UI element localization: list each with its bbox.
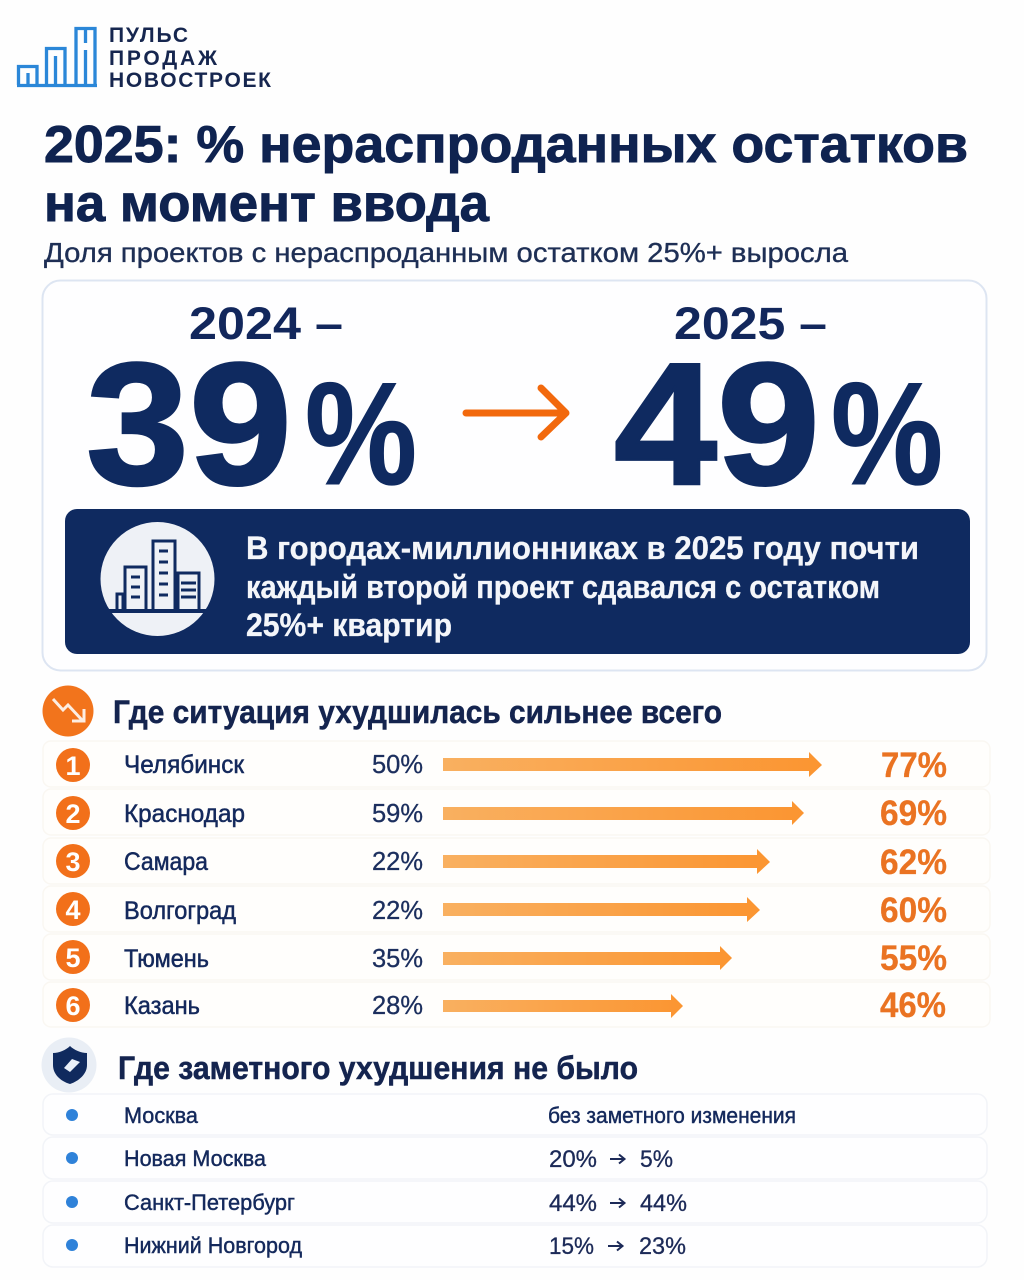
row 2: Краснодар: 69% xyxy=(880,794,947,833)
title xyxy=(44,116,968,233)
row 2: Краснодар: 59% xyxy=(372,800,423,828)
row: Нижний Новгород: Нижний Новгород xyxy=(124,1233,302,1258)
row 6: Казань: Казань xyxy=(124,992,200,1020)
row: Нижний Новгород: 15% xyxy=(549,1233,594,1260)
row: Санкт-Петербург xyxy=(43,1181,987,1223)
2025 value xyxy=(614,326,943,521)
row 6: Казань: 46% xyxy=(880,986,946,1025)
2025 value: 49 xyxy=(614,326,820,521)
row 2: Краснодар: Краснодар xyxy=(124,800,245,828)
row: Санкт-Петербург: Санкт-Петербург xyxy=(124,1190,295,1215)
icon: falling trend xyxy=(42,686,94,736)
row: Нижний Новгород: 23% xyxy=(639,1233,686,1260)
2025 label: 2025 – xyxy=(674,298,827,349)
banner text: 25%+ квартир xyxy=(246,607,452,643)
row 5: Тюмень: 35% xyxy=(372,945,423,973)
2024 value: % xyxy=(305,352,417,515)
row 4: Волгоград: 60% xyxy=(880,891,947,930)
row 2: Краснодар: 2 xyxy=(65,799,81,829)
section heading: worsened most: Где ситуация ухудшилась сильнее всего xyxy=(113,694,722,730)
row 1: Челябинск: 77% xyxy=(881,746,947,785)
row 3: Самара xyxy=(43,838,990,884)
section heading: no notable worsening xyxy=(42,1038,638,1092)
banner text xyxy=(246,530,919,643)
logo wordmark: НОВОСТРОЕК xyxy=(109,69,271,92)
logo icon: bars xyxy=(17,28,97,86)
row: Москва: Москва xyxy=(124,1103,198,1128)
row 1: Челябинск xyxy=(43,741,990,787)
row 1: Челябинск: 1 xyxy=(65,751,81,781)
row: Санкт-Петербург: 44% xyxy=(549,1190,597,1217)
row 1: Челябинск: Челябинск xyxy=(124,751,245,779)
banner text: В городах-миллионниках в 2025 году почти xyxy=(246,530,919,566)
banner text: каждый второй проект сдавался с остатком xyxy=(246,569,880,605)
row 3: Самара: 3 xyxy=(65,847,81,877)
row 3: Самара: 62% xyxy=(880,843,947,882)
logo wordmark: ПРОДАЖ xyxy=(109,47,218,70)
row 6: Казань: 28% xyxy=(372,992,423,1020)
icon: shield xyxy=(42,1038,96,1092)
row 4: Волгоград: 4 xyxy=(65,895,81,925)
row 3: Самара: 22% xyxy=(372,848,423,876)
2025 value: % xyxy=(831,352,943,515)
row 4: Волгоград: 22% xyxy=(372,897,423,925)
title: 2025: % нераспроданных остатков xyxy=(44,116,968,174)
section heading: no notable worsening: Где заметного ухудшения не было xyxy=(118,1050,638,1086)
row 5: Тюмень xyxy=(43,934,990,980)
arrow xyxy=(466,388,566,437)
section heading: worsened most xyxy=(42,686,722,736)
2024 value: 39 xyxy=(86,326,292,521)
title: на момент ввода xyxy=(44,175,490,233)
logo xyxy=(17,24,271,92)
row: Новая Москва: 20% xyxy=(549,1146,597,1173)
panel: comparison 2024 vs 2025 xyxy=(42,280,986,670)
row 6: Казань xyxy=(43,982,990,1027)
row 4: Волгоград: Волгоград xyxy=(124,897,236,925)
row: Новая Москва: 5% xyxy=(640,1146,673,1173)
row: Новая Москва xyxy=(43,1137,987,1179)
2024 label: 2024 – xyxy=(189,298,343,349)
row: Москва xyxy=(43,1094,987,1135)
row: Санкт-Петербург: 44% xyxy=(640,1190,687,1217)
row: Москва: без заметного изменения xyxy=(548,1103,796,1128)
banner xyxy=(65,509,970,654)
row 5: Тюмень: Тюмень xyxy=(124,945,209,973)
row 5: Тюмень: 5 xyxy=(65,943,81,973)
logo wordmark xyxy=(109,24,271,92)
row: Новая Москва: Новая Москва xyxy=(124,1146,266,1171)
icon: city buildings xyxy=(100,522,214,636)
row: Нижний Новгород xyxy=(43,1225,987,1267)
row 4: Волгоград xyxy=(43,886,990,932)
row 5: Тюмень: 55% xyxy=(880,939,947,978)
row 3: Самара: Самара xyxy=(124,848,208,876)
row 6: Казань: 6 xyxy=(65,991,81,1021)
row 1: Челябинск: 50% xyxy=(372,751,423,779)
logo wordmark: ПУЛЬС xyxy=(109,24,188,47)
row 2: Краснодар xyxy=(43,789,990,835)
subtitle: Доля проектов с нераспроданным остатком 25%+ выросла xyxy=(44,237,848,268)
2024 value xyxy=(86,326,417,521)
